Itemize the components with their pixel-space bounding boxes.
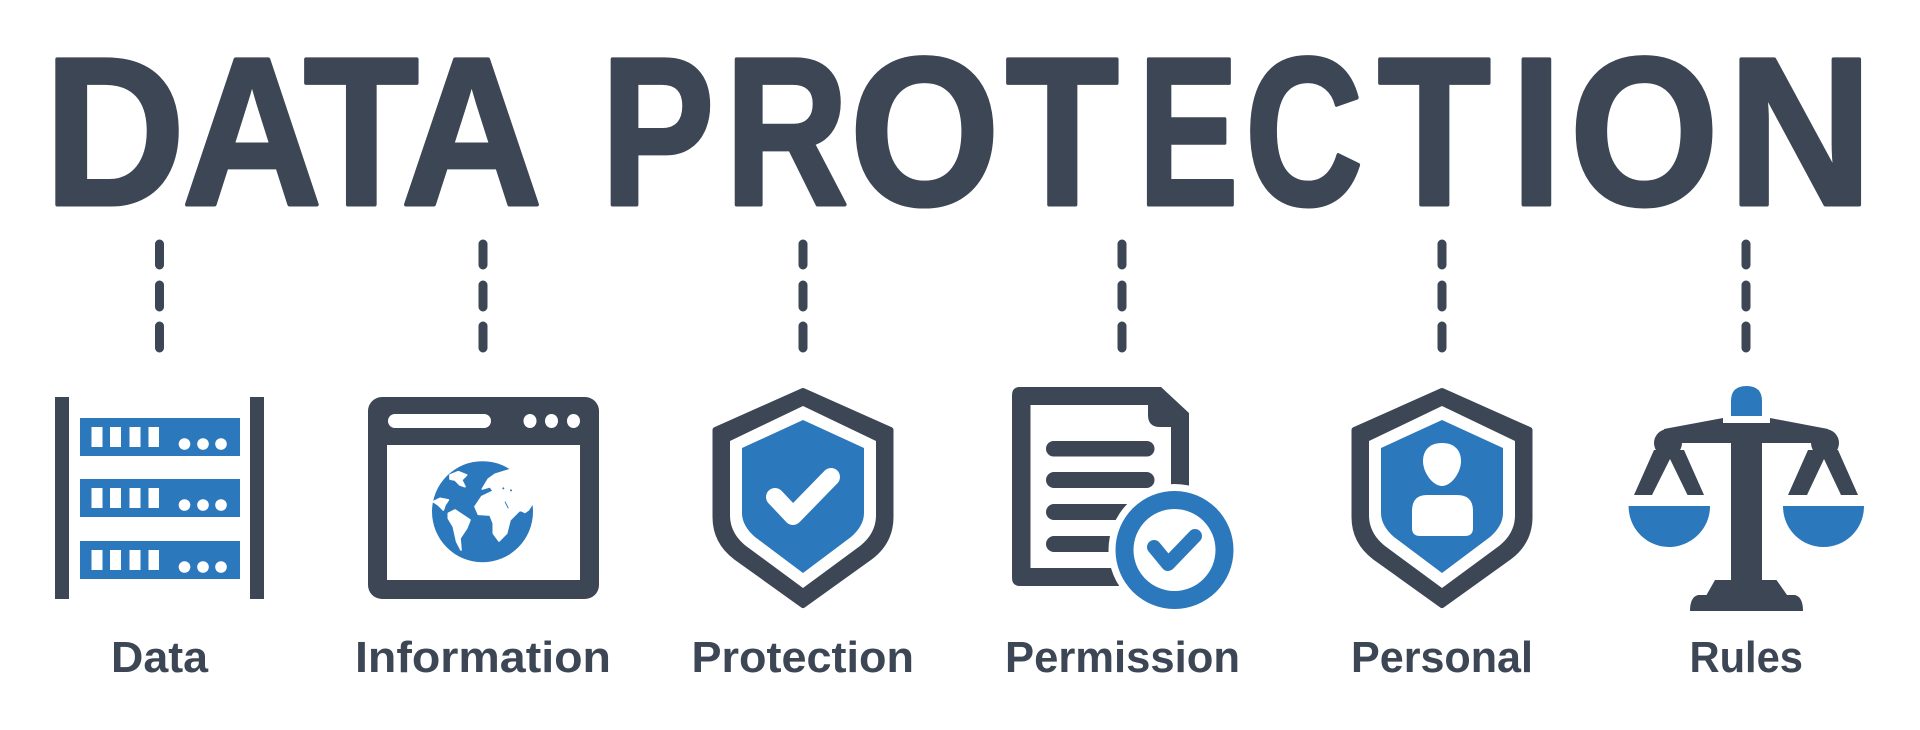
title: O: [1570, 14, 1719, 250]
title: P: [601, 14, 714, 250]
icon: balance scales: [1629, 386, 1864, 611]
icon: browser window with globe: [368, 397, 599, 599]
icon: shield with check: [716, 391, 890, 605]
label: Personal: Personal: [1351, 633, 1533, 682]
icon: server rack: [55, 397, 264, 599]
icon: shield with person: [1354, 391, 1530, 605]
dashed connector: Rules: [1742, 244, 1750, 348]
dashed connector: Data: [155, 244, 164, 348]
label: Protection: Protection: [692, 633, 914, 682]
title: N: [1728, 14, 1873, 250]
title: C: [1245, 14, 1363, 250]
title: I: [1511, 14, 1562, 250]
title: T: [304, 14, 419, 250]
dashed connector: Information: [478, 244, 488, 348]
title: R: [725, 14, 848, 250]
title: E: [1138, 14, 1238, 250]
label: Data: Data: [111, 633, 209, 682]
title: T: [1006, 14, 1119, 250]
label: Permission: Permission: [1005, 633, 1240, 682]
label: Information: Information: [355, 633, 611, 682]
dashed connector: Personal: [1438, 244, 1446, 348]
icon: document with approval check: [1012, 387, 1240, 616]
title: A: [401, 14, 537, 250]
title: A: [182, 14, 322, 250]
title: O: [850, 14, 1000, 250]
title: D: [44, 14, 185, 250]
label: Rules: Rules: [1690, 633, 1803, 682]
dashed connector: Permission: [1118, 244, 1126, 348]
dashed connector: Protection: [798, 244, 808, 348]
title: T: [1378, 14, 1491, 250]
